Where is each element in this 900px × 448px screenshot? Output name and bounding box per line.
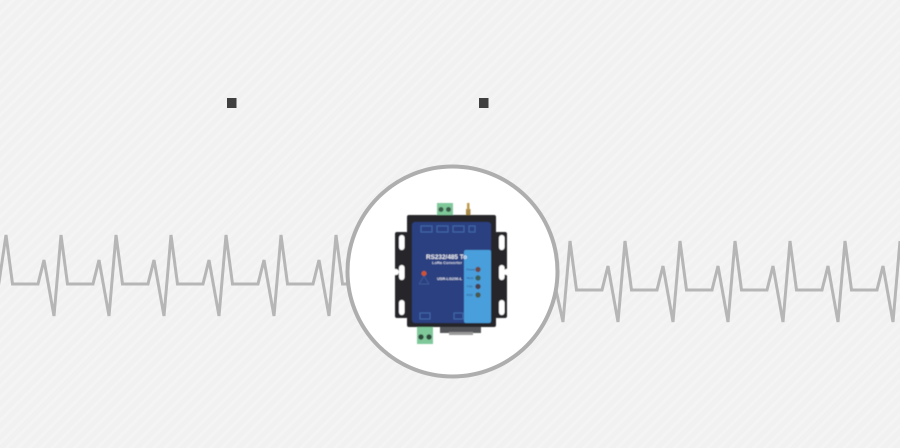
bottom terminal block bbox=[417, 326, 433, 344]
indicator lights bbox=[466, 267, 481, 298]
port labels top bbox=[421, 226, 475, 232]
indicator lights: Work bbox=[466, 276, 474, 280]
light blue indicator panel bbox=[464, 250, 491, 323]
right mounting ear bbox=[495, 232, 510, 318]
product subtitle: LoRa Converter bbox=[432, 260, 462, 265]
square marker right bbox=[479, 98, 488, 108]
top terminal block bbox=[437, 203, 453, 216]
left mounting ear bbox=[393, 232, 408, 318]
pulse line left bbox=[0, 235, 352, 316]
product circle bbox=[348, 166, 558, 376]
port labels bottom bbox=[420, 313, 463, 319]
indicator lights: RXD bbox=[466, 293, 474, 297]
device: LoRa converter bbox=[393, 203, 510, 344]
pulse line right bbox=[550, 241, 900, 322]
square marker left bbox=[227, 98, 236, 108]
antenna bbox=[466, 203, 470, 216]
indicator lights: TXD bbox=[466, 284, 473, 288]
device body bbox=[407, 215, 496, 327]
indicator lights: Power bbox=[466, 268, 475, 272]
blue front panel bbox=[412, 222, 491, 323]
model number: USR-LG206-L bbox=[437, 276, 463, 281]
serial port bbox=[440, 326, 481, 335]
product title: RS232/485 To bbox=[426, 254, 467, 261]
brand logo bbox=[419, 271, 429, 284]
